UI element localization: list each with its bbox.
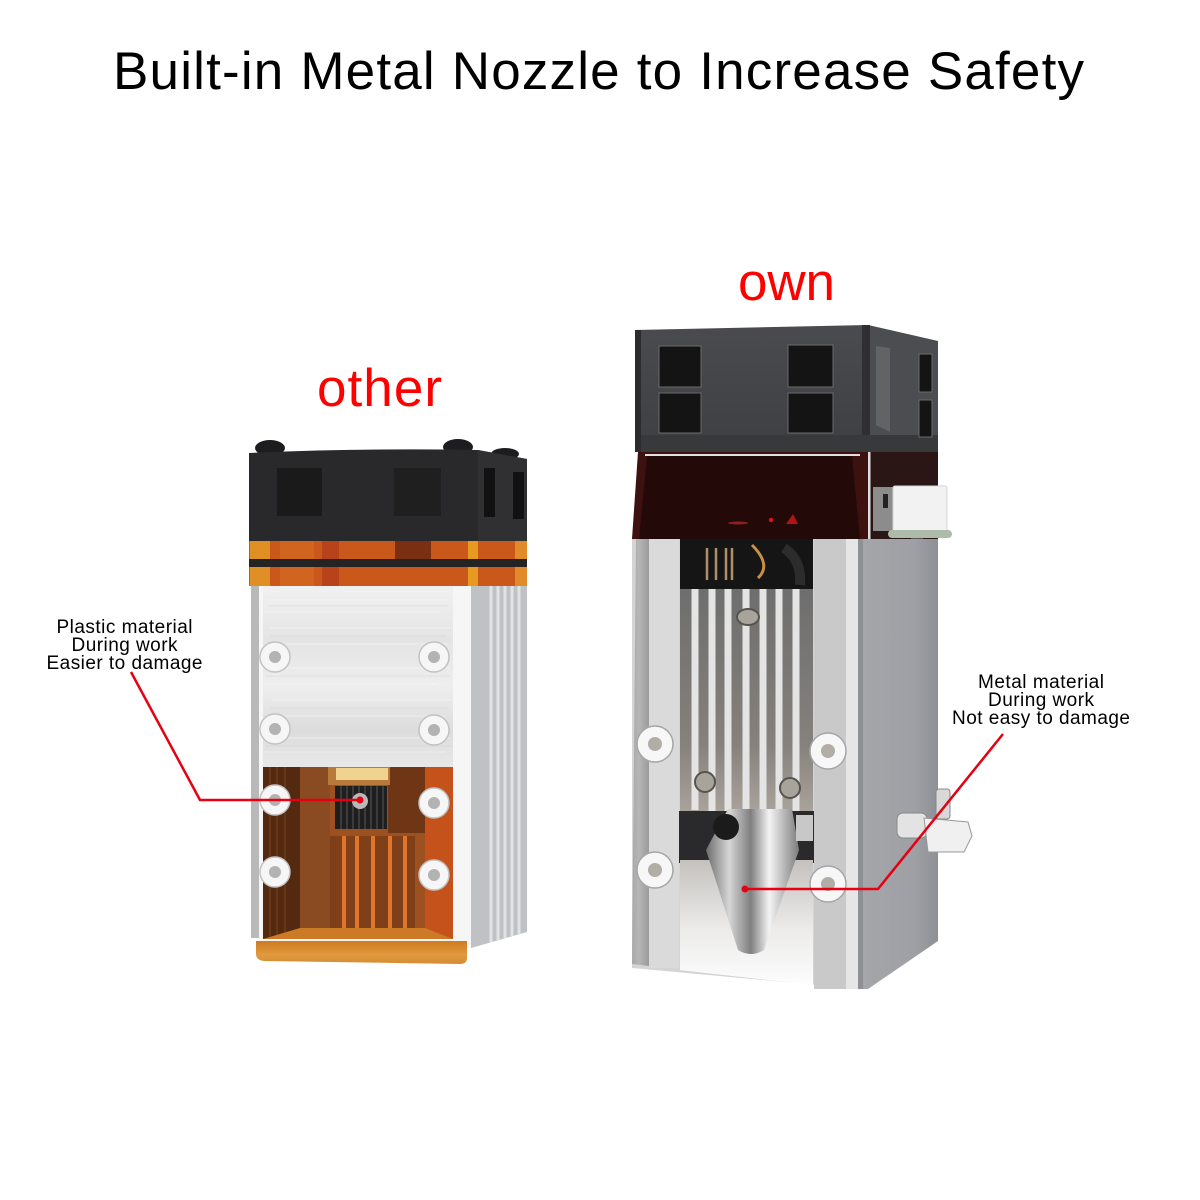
fan housing, plastic black	[249, 439, 527, 541]
callout text: other	[46, 617, 202, 674]
callout text: own: Metal material	[978, 672, 1104, 693]
heading: other: other	[317, 359, 442, 418]
heading: own: own	[738, 253, 835, 312]
title: Built-in Metal Nozzle to Increase Safety	[113, 42, 1084, 101]
callout text: own: During work	[988, 690, 1094, 711]
fan housing, dark grey	[635, 325, 938, 452]
mounting screws	[637, 726, 846, 902]
callout leader line: own	[742, 734, 1003, 892]
callout text: other: Plastic material	[56, 617, 192, 638]
aluminium body	[251, 586, 527, 948]
callout text: own: Not easy to damage	[952, 708, 1130, 729]
product: own laser module	[632, 325, 972, 989]
side connector	[873, 486, 952, 545]
mounting screws	[260, 642, 449, 890]
callout text: other: Easier to damage	[46, 653, 202, 674]
heat sink screws	[695, 609, 800, 798]
product: other laser module	[249, 439, 527, 964]
aluminium body	[632, 539, 938, 989]
open window with heat sink	[679, 539, 814, 985]
open window with heat sink in amber tint	[263, 767, 453, 939]
callout text: own	[952, 672, 1130, 729]
dark red translucent cover	[632, 452, 938, 539]
callout text: other: During work	[72, 635, 178, 656]
callout leader line: other	[131, 672, 364, 804]
side air fitting	[897, 789, 972, 852]
metal nozzle cone	[706, 809, 813, 954]
amber bottom lip	[256, 941, 467, 964]
amber plastic band	[249, 541, 527, 586]
